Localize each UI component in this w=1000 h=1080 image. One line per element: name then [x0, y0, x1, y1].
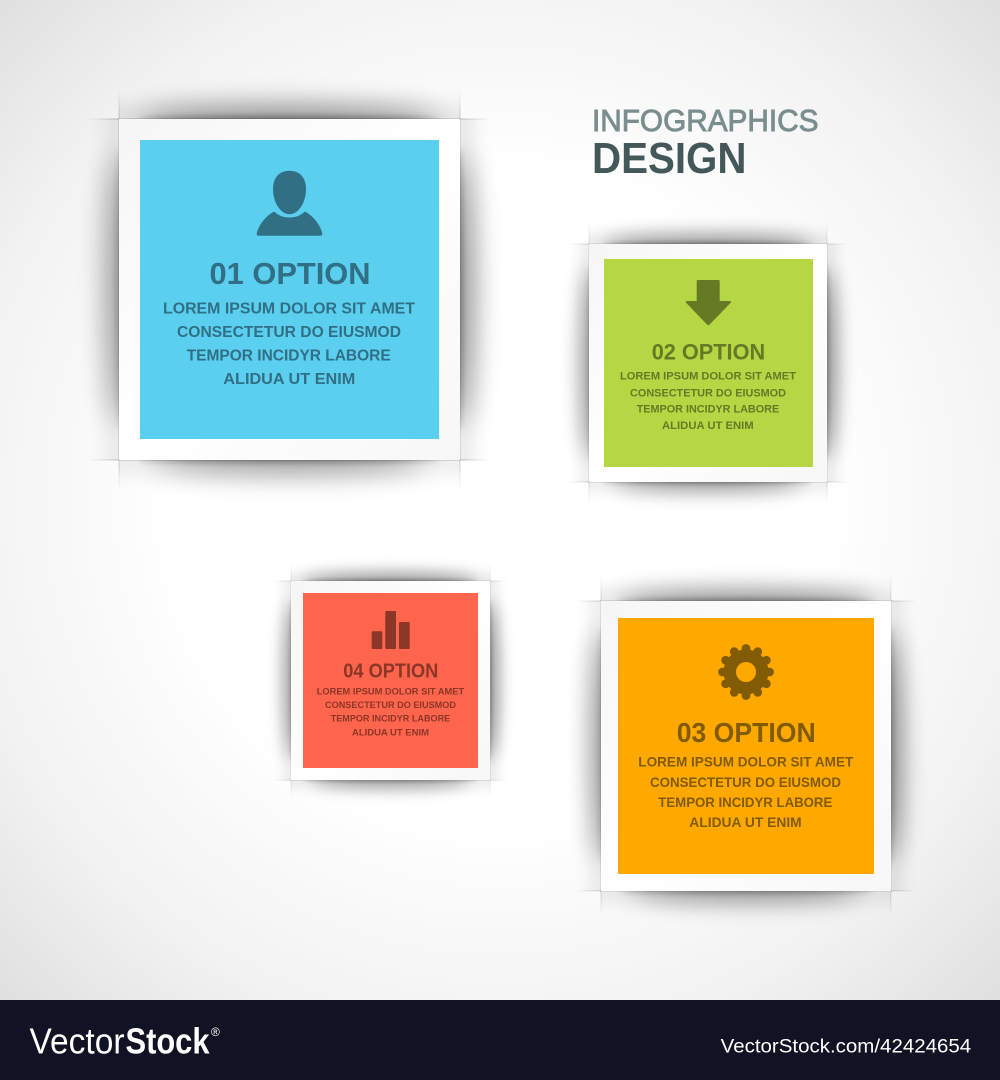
text block: 03 option: LOREM IPSUM DOLOR SIT AMET: [638, 754, 854, 770]
heading: 03 option: 03 OPTION: [677, 717, 816, 748]
icon: person: [257, 171, 322, 236]
text block: 01 option: ALIDUA UT ENIM: [223, 371, 355, 388]
panel: 04 option: [291, 581, 490, 780]
icon: bar chart: [372, 611, 410, 649]
footer bar: [0, 1000, 1000, 1080]
text block: 04 option: LOREM IPSUM DOLOR SIT AMET: [317, 686, 464, 697]
logo: VectorStock: Vector: [30, 1020, 125, 1061]
heading: 01 option: 01 OPTION: [210, 256, 370, 291]
text block: 02 option: CONSECTETUR DO EIUSMOD: [630, 387, 786, 399]
icon: down arrow: [686, 280, 731, 325]
title: [592, 103, 818, 183]
text block: 03 option: [638, 754, 854, 830]
heading: 02 option: 02 OPTION: [652, 339, 765, 364]
text block: 02 option: LOREM IPSUM DOLOR SIT AMET: [620, 371, 796, 383]
text block: 02 option: TEMPOR INCIDYR LABORE: [637, 404, 779, 416]
text block: 02 option: [620, 371, 796, 432]
text block: 04 option: [317, 686, 464, 739]
text block: 03 option: ALIDUA UT ENIM: [689, 814, 802, 830]
text block: 02 option: ALIDUA UT ENIM: [662, 420, 754, 432]
panel: 03 option: [601, 601, 891, 891]
logo: VectorStock: ®: [211, 1025, 220, 1039]
panel: 02 option: [589, 244, 827, 482]
heading: 04 option: 04 OPTION: [343, 661, 438, 683]
text block: 01 option: [163, 300, 416, 388]
text block: 04 option: TEMPOR INCIDYR LABORE: [331, 714, 450, 725]
text block: 04 option: CONSECTETUR DO EIUSMOD: [325, 700, 456, 711]
panel: 01 option: [119, 119, 460, 460]
image id: VectorStock.com/42424654: [721, 1037, 972, 1058]
text block: 04 option: ALIDUA UT ENIM: [352, 728, 429, 739]
title: DESIGN: [592, 134, 746, 183]
text block: 01 option: TEMPOR INCIDYR LABORE: [187, 348, 391, 365]
logo: VectorStock: Stock: [126, 1020, 210, 1061]
text block: 01 option: LOREM IPSUM DOLOR SIT AMET: [163, 300, 416, 317]
text block: 03 option: CONSECTETUR DO EIUSMOD: [650, 774, 841, 790]
icon: gear: [718, 644, 774, 700]
text block: 01 option: CONSECTETUR DO EIUSMOD: [177, 324, 401, 341]
logo: VectorStock: [30, 1020, 220, 1061]
text block: 03 option: TEMPOR INCIDYR LABORE: [658, 794, 832, 810]
title: INFOGRAPHICS: [592, 103, 818, 138]
